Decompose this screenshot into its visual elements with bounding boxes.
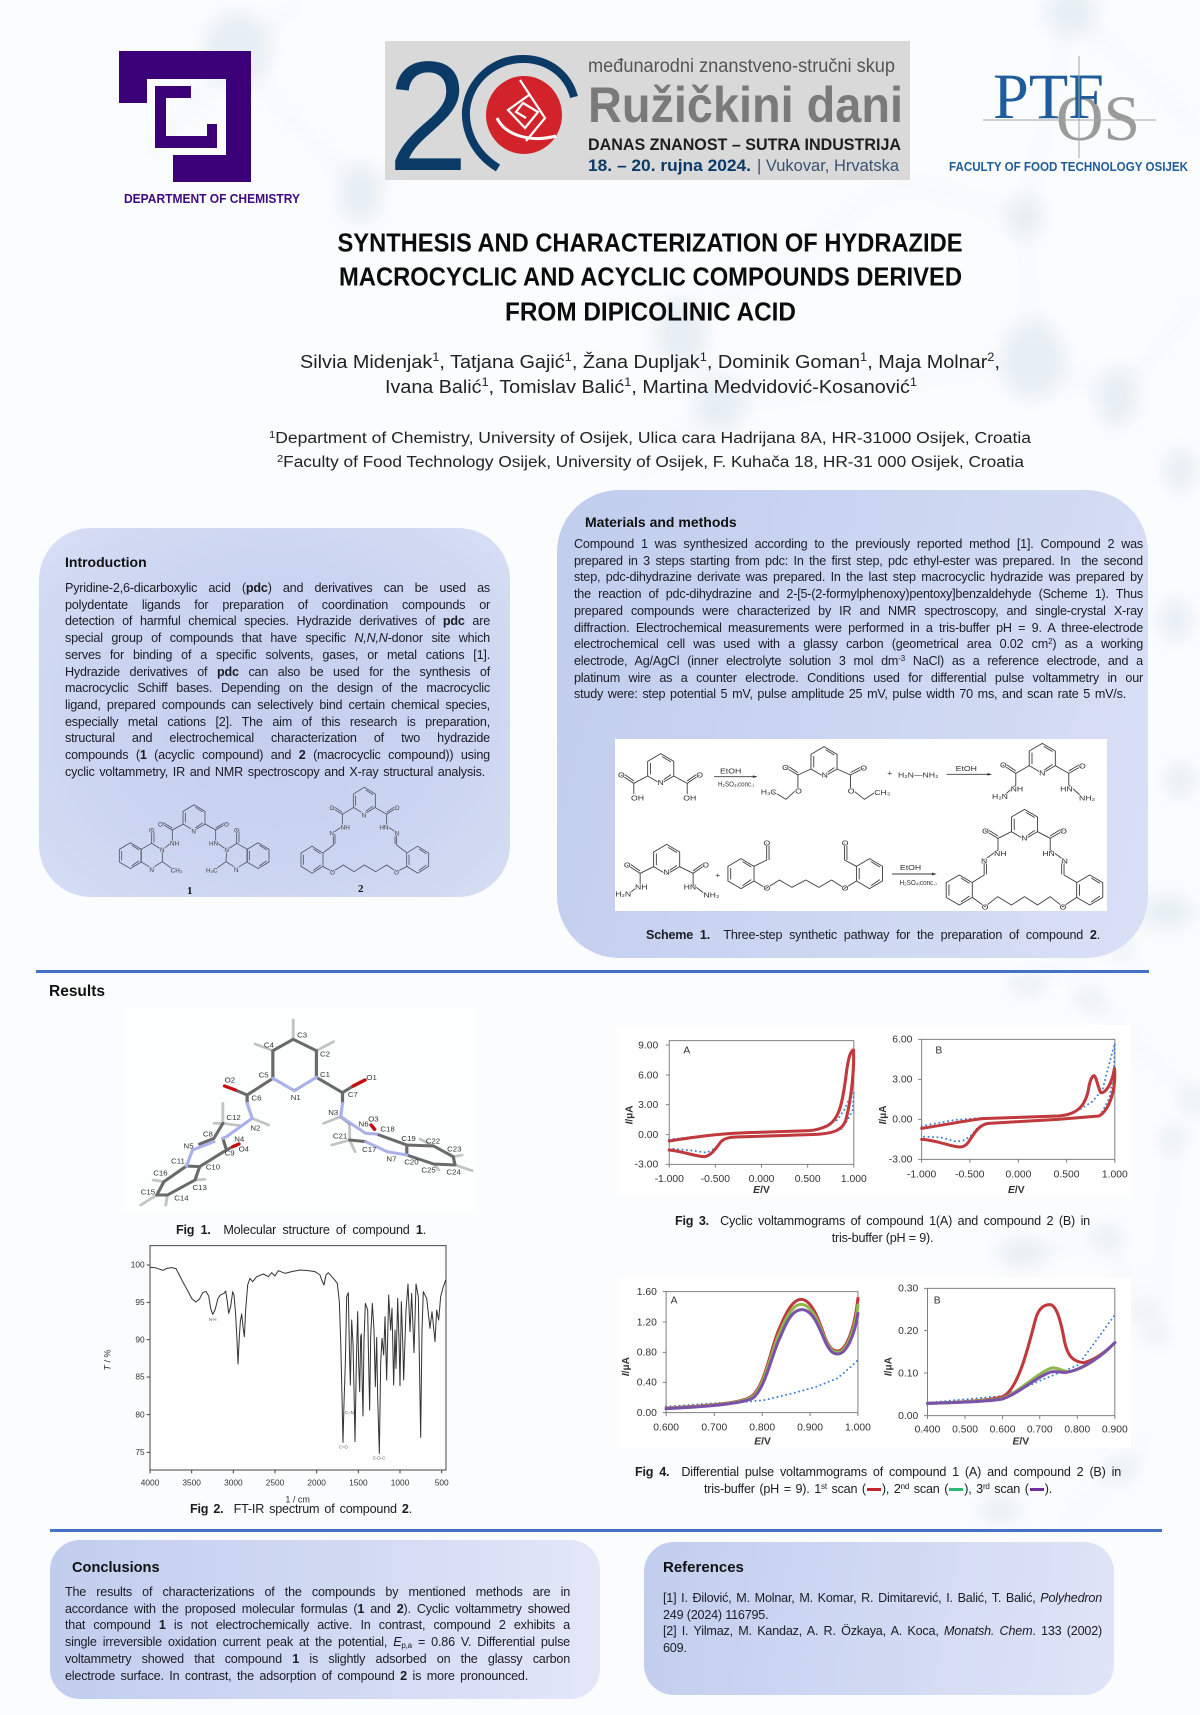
text: methods body: diffraction. Electrochemical measurements were performed in a tris-buffer pH = 9. A three-electrode — [574, 621, 1143, 635]
chart: synthetic scheme 1: N — [663, 868, 670, 876]
chart: molecular structure of compound 1: O2 — [225, 1076, 235, 1084]
chart: DPV compound 2 (B): 0.800 — [1064, 1425, 1091, 1436]
chart: synthetic scheme 1: N — [1062, 857, 1068, 865]
panel: introduction: O — [330, 870, 335, 877]
chart: FT-IR spectrum: 1500 — [349, 1478, 368, 1488]
chart: synthetic scheme 1: O — [1060, 827, 1067, 835]
structure: compound 2: N — [395, 830, 400, 837]
chart: DPV compound 2 (B): B — [934, 1295, 941, 1306]
title: FROM DIPICOLINIC ACID — [505, 296, 796, 326]
chart: synthetic scheme 1: NH — [994, 850, 1007, 858]
chart: DPV compound 1 (A): 0.40 — [637, 1378, 657, 1389]
text: introduction body: structural and electrochemical characterization of two hydrazide — [65, 731, 490, 745]
chart: synthetic scheme 1: N — [1021, 834, 1028, 842]
chart: differential pulse voltammograms — [617, 1278, 1131, 1448]
chart: DPV compound 1 (A): A — [671, 1295, 678, 1306]
chart: synthetic scheme 1: OH — [631, 794, 644, 802]
chart: CV compound 1 (A): -1.000 — [655, 1174, 684, 1185]
chart: CV compound 2 (B): 3.00 — [892, 1075, 913, 1086]
PTF OS wordmark: PTF — [993, 61, 1104, 133]
text: methods body: step, pdc-dihydrazine derivate was prepared. In the last step macrocyclic hydrazide was prepared by — [574, 570, 1143, 584]
chart: molecular structure of compound 1: C1 — [320, 1070, 330, 1079]
chart: DPV compound 1 (A): I/μA — [621, 1357, 632, 1376]
text: methods body — [574, 537, 1144, 701]
chart: CV compound 1 (A): 9.00 — [638, 1040, 659, 1051]
structure: compound 1: CH₃ — [171, 868, 183, 875]
text: references list: [1] I. Đilović, M. Molnar, M. Komar, R. Dimitarević, I. Balić, T. Balić, Polyhedron — [663, 1591, 1102, 1605]
text: methods body: the reaction of pdc-dihydrazine and 2-[5-(2-formylphenoxy)pentoxy]benzaldehyde (Scheme 1). Thus — [574, 587, 1143, 601]
chart: DPV compound 1 (A): 1.20 — [637, 1317, 657, 1328]
text: introduction body: Pyridine-2,6-dicarboxylic acid (pdc) and derivatives can be used as — [65, 581, 490, 595]
chart: molecular structure of compound 1: C9 — [225, 1149, 235, 1157]
chart: CV compound 2 (B): 0.000 — [1005, 1170, 1032, 1181]
conference text: međunarodni znanstveno-stručni skup — [588, 56, 895, 77]
chart: DPV compound 2 (B): I/μA — [884, 1357, 895, 1376]
chart: synthetic scheme 1: HN — [684, 883, 696, 891]
caption: fig 4: tris-buffer (pH = 9). 1st scan ( ), 2nd scan ( ), 3rd scan ( ). — [704, 1482, 1052, 1496]
chart: synthetic scheme 1: H₂SO₄₍conc.₎ — [718, 780, 754, 788]
conference text: DANAS ZNANOST – SUTRA INDUSTRIJA — [588, 135, 901, 154]
conference text: Ružičkini dani — [588, 77, 903, 133]
chart: DPV compound 1 (A): 0.80 — [637, 1348, 657, 1359]
chart: CV compound 2 (B): -3.00 — [889, 1155, 913, 1166]
chart: synthetic scheme 1: N — [1039, 769, 1046, 777]
chart: molecular structure of compound 1: C19 — [401, 1134, 416, 1143]
affiliations: Faculty of Food Technology Osijek, University of Osijek, F. Kuhača 18, HR-31 000 Osijek, Croatia — [283, 454, 1024, 471]
affiliations — [269, 430, 1031, 471]
chart: synthetic scheme 1: CH₃ — [874, 789, 890, 797]
panel: introduction — [39, 528, 510, 897]
structure: compound 1: N — [224, 847, 229, 854]
divider: above results — [36, 970, 1149, 973]
chart: FT-IR spectrum — [103, 1245, 449, 1504]
affiliations: Department of Chemistry, University of Osijek, Ulica cara Hadrijana 8A, HR-31000 Osijek, Croatia — [275, 430, 1031, 447]
chart: CV compound 1 (A): E/V — [753, 1185, 770, 1196]
chart: molecular structure of compound 1: C22 — [426, 1137, 440, 1146]
text: introduction body: detection of harmful chemical species. Hydrazide derivatives of pdc are — [65, 614, 490, 628]
chart: FT-IR spectrum: 95 — [135, 1297, 145, 1307]
chart: FT-IR spectrum: 85 — [135, 1372, 145, 1382]
text: introduction body: polydentate ligands for preparation of coordination compounds or — [65, 598, 490, 612]
chart: molecular structure of compound 1: N7 — [386, 1155, 396, 1164]
divider: above conclusions — [50, 1529, 1162, 1532]
text: references list: 609. — [663, 1641, 687, 1655]
chart: molecular structure of compound 1: C10 — [206, 1163, 220, 1171]
chart: synthetic scheme 1: O — [1060, 903, 1066, 911]
chart: synthetic scheme 1: O — [848, 787, 854, 795]
chart: CV compound 2 (B): 6.00 — [892, 1035, 913, 1046]
text: conclusions body: The results of characterizations of the compounds by mentioned methods are in — [65, 1585, 570, 1599]
chart: synthetic scheme 1: O — [1079, 762, 1086, 770]
text: introduction body: macrocyclic Schiff bases. Depending on the design of the macrocyclic — [65, 681, 490, 695]
authors: 1 — [910, 375, 917, 389]
chart: synthetic scheme 1: + — [715, 871, 721, 879]
chart: synthetic scheme 1: O — [982, 827, 989, 835]
structure: compound 2: HN — [379, 824, 389, 831]
chart: molecular structure of compound 1: C23 — [447, 1145, 462, 1154]
heading: results: Results — [49, 983, 105, 1000]
text: references list: 249 (2024) 116795. — [663, 1608, 768, 1622]
chart: molecular structure of compound 1: N6 — [359, 1120, 369, 1129]
chart: molecular structure of compound 1: C7 — [348, 1090, 358, 1099]
chart: DPV compound 2 (B): 0.900 — [1102, 1425, 1128, 1436]
chart: cyclic voltammograms — [617, 1025, 1131, 1197]
chart: CV compound 1 (A): 1.000 — [841, 1174, 867, 1185]
panel: references — [644, 1542, 1114, 1695]
chart: synthetic scheme 1: O — [764, 884, 770, 892]
structure: compound 1: HN — [209, 841, 219, 848]
chart: synthetic scheme 1: O — [842, 839, 849, 847]
text: introduction body: serves for binding of a specific solvents, gases, or metal cations [1]. — [65, 648, 490, 662]
conference text: 18. – 20. rujna 2024. — [588, 156, 751, 175]
chart: CV compound 2 (B): 0.00 — [892, 1115, 913, 1126]
text: introduction body: compounds (1 (acyclic compound) and 2 (macrocyclic compound)) using — [65, 748, 490, 762]
caption: fig 4: Fig 4. Differential pulse voltammograms of compound 1 (A) and compound 2 (B) in — [635, 1465, 1121, 1479]
heading: conclusions: Conclusions — [72, 1560, 160, 1576]
conference text: | Vukovar, Hrvatska — [757, 156, 900, 175]
chart: molecular structure of compound 1: C6 — [251, 1094, 261, 1103]
chart: CV compound 1 (A) — [624, 1040, 867, 1196]
chart: synthetic scheme 1: N — [822, 771, 828, 779]
chart: molecular structure of compound 1: C14 — [174, 1194, 189, 1203]
chart: DPV compound 2 (B): 0.400 — [915, 1425, 941, 1436]
chart: CV compound 1 (A): 0.00 — [638, 1130, 659, 1141]
chart: synthetic scheme 1: EtOH — [900, 864, 921, 872]
chart: molecular structure of compound 1: C15 — [141, 1188, 155, 1196]
authors: 2 — [987, 350, 995, 364]
chart: synthetic scheme 1: OH — [683, 794, 696, 802]
icon: purple square bracket mark — [119, 51, 251, 182]
text: methods body: electrochemical cell was used with a glassy carbon (geometrical area 0.02 cm2) as a working — [574, 637, 1143, 651]
chart: FT-IR spectrum: 100 — [131, 1260, 145, 1270]
text: conclusions body: accordance with the proposed molecular formulas (1 and 2). Cyclic voltammetry showed — [65, 1602, 570, 1616]
chart: synthetic scheme 1: NH — [1011, 785, 1023, 793]
chart: DPV compound 1 (A): 0.700 — [701, 1422, 728, 1433]
structure: compound 1: NH — [170, 841, 180, 848]
text: conclusions body: electrode surface. In contrast, the adsorption of compound 2 is more pronounced. — [65, 1669, 528, 1683]
chart: CV compound 2 (B): B — [935, 1045, 943, 1056]
chart: CV compound 2 (B): -0.500 — [955, 1170, 985, 1181]
text: methods body: platinum wire as a counter electrode. Conditions used for differential pulse voltammetry in our — [574, 671, 1143, 685]
structure: compound 1: H₃C — [206, 868, 218, 875]
icon: red rose — [486, 76, 562, 154]
text: conclusions body — [65, 1585, 570, 1683]
chart: molecular structure of compound 1: N3 — [328, 1108, 338, 1117]
chart: molecular structure of compound 1: C20 — [404, 1158, 419, 1166]
chart: synthetic scheme 1: O — [624, 861, 631, 869]
panel: introduction: O — [394, 870, 399, 877]
chart: molecular structure of compound 1: C2 — [320, 1050, 330, 1059]
chart: synthetic scheme 1: H₂N — [992, 793, 1008, 801]
chart: molecular structure of compound 1: C5 — [259, 1071, 269, 1079]
chart: CV compound 1 (A): 0.000 — [749, 1174, 775, 1185]
chart: CV compound 1 (A): 3.00 — [638, 1100, 659, 1111]
chart: FT-IR spectrum: N-H — [209, 1317, 217, 1322]
chart: DPV compound 1 (A): E/V — [754, 1437, 771, 1448]
chart: molecular structure of compound 1 — [123, 1008, 478, 1213]
text: introduction body: cyclic voltammetry, IR and NMR spectroscopy and X-ray structural analysis. — [65, 765, 485, 779]
chart: FT-IR spectrum: T / % — [103, 1349, 113, 1371]
chart: DPV compound 1 (A): 0.600 — [653, 1422, 679, 1433]
chart: FT-IR spectrum: C=N — [345, 1410, 354, 1415]
text: introduction body: ligand, prepared compounds can selectively bind certain chemical species, — [65, 698, 490, 712]
structure: compound 2: NH — [341, 824, 350, 831]
text: methods body: electrode, Ag/AgCl (inner electrolyte solution 3 mol dm-3 NaCl) as a reference electrode, and a — [574, 654, 1143, 668]
chart: CV compound 2 (B): 0.500 — [1054, 1170, 1080, 1181]
chart: CV compound 1 (A): -0.500 — [701, 1174, 730, 1185]
chart: synthetic scheme 1: H₂N—NH₂ — [898, 771, 938, 779]
chart: synthetic scheme 1: HN — [1042, 850, 1055, 858]
chart: DPV compound 1 (A): 1.000 — [845, 1422, 871, 1433]
authors — [300, 350, 1000, 397]
chart: synthetic scheme 1: O — [860, 764, 867, 772]
chart: molecular structure of compound 1: C13 — [193, 1183, 207, 1192]
chart: DPV compound 2 (B): E/V — [1012, 1437, 1029, 1448]
structure: compound 1: N — [160, 847, 165, 854]
text: conclusions body: single irreversible oxidation current peak at the potential, Ep,a = 0.86 V. Differential pulse — [65, 1635, 570, 1650]
authors: 1 — [565, 350, 572, 364]
authors: , Žana Dupljak — [572, 351, 700, 372]
affiliations: 2 — [277, 454, 284, 465]
chart: molecular structure of compound 1: O1 — [366, 1073, 377, 1082]
text: references list: [2] I. Yilmaz, M. Kandaz, A. R. Özkaya, A. Koca, Monatsh. Chem. 133 (2002) — [663, 1624, 1102, 1638]
text: conclusions body: voltammetry showed that compound 1 is slightly adsorbed on the glassy carbon — [65, 1652, 570, 1666]
chart: FT-IR spectrum: 2000 — [307, 1478, 326, 1488]
chart: molecular structure of compound 1: C12 — [226, 1113, 241, 1122]
chart: DPV compound 2 (B): 0.30 — [898, 1284, 919, 1295]
authors: , Dominik Goman — [707, 351, 860, 372]
caption: scheme 1: Scheme 1. Three-step synthetic pathway for the preparation of compound 2. — [646, 928, 1100, 942]
text: methods body: prepared compounds were characterized by IR and NMR spectroscopy, and single-crystal X-ray — [574, 604, 1143, 618]
chart: FT-IR spectrum: C-O-C — [373, 1455, 385, 1460]
chart: FT-IR spectrum: 1 / cm — [285, 1494, 310, 1504]
panel: conclusions — [50, 1540, 600, 1699]
chart: molecular structure of compound 1: C11 — [171, 1157, 185, 1166]
chart: molecular structure of compound 1: N1 — [291, 1093, 301, 1102]
chart: CV compound 1 (A): I/μA — [624, 1105, 635, 1124]
chart: molecular structure of compound 1: C24 — [446, 1168, 461, 1177]
chart: molecular structure of compound 1: N4 — [234, 1135, 244, 1143]
chart: molecular structure of compound 1: C16 — [153, 1169, 168, 1177]
chart: DPV compound 2 (B): 0.00 — [898, 1411, 919, 1422]
chart: FT-IR spectrum: 75 — [135, 1447, 145, 1457]
authors: 1 — [700, 350, 707, 364]
chart: synthetic scheme 1: H₃C — [761, 788, 777, 796]
panel: materials and methods — [557, 490, 1148, 958]
chart: synthetic scheme 1: O — [618, 771, 625, 779]
chart: synthetic scheme 1: NH₂ — [703, 891, 719, 899]
chart: DPV compound 2 (B): 0.20 — [898, 1326, 919, 1337]
label: compound 2: 2 — [358, 883, 364, 895]
chart: DPV compound 2 (B): 0.700 — [1027, 1425, 1053, 1436]
caption: fig 3: Fig 3. Cyclic voltammograms of compound 1(A) and compound 2 (B) in — [675, 1214, 1090, 1228]
chart: molecular structure of compound 1: C21 — [333, 1132, 347, 1140]
logo: PTFOS faculty of food technology — [949, 56, 1188, 174]
chart: synthetic scheme 1: EtOH — [956, 765, 977, 773]
text: introduction body — [65, 581, 490, 779]
chart: synthetic scheme 1: O — [1000, 761, 1007, 769]
authors: Ivana Balić — [385, 376, 476, 397]
title: MACROCYCLIC AND ACYCLIC COMPOUNDS DERIVED — [339, 262, 962, 292]
chart: molecular structure of compound 1: C25 — [421, 1166, 436, 1174]
text: references list — [663, 1591, 1102, 1655]
chart: CV compound 1 (A): A — [683, 1045, 690, 1056]
chart: DPV compound 1 (A): 0.800 — [749, 1422, 775, 1433]
chart: DPV compound 1 (A) — [621, 1287, 871, 1448]
text: methods body: study were: step potential 5 mV, pulse amplitude 25 mV, pulse width 70 ms, and scan rate 5 mV/s. — [574, 687, 1126, 701]
caption: fig 3: tris-buffer (pH = 9). — [832, 1231, 933, 1245]
chart: CV compound 1 (A): 0.500 — [795, 1174, 821, 1185]
affiliations: 1 — [269, 430, 276, 441]
chart: molecular structure of compound 1: O3 — [368, 1115, 379, 1124]
chart: molecular structure of compound 1: C18 — [380, 1125, 395, 1134]
chart: synthetic scheme 1: O — [696, 771, 703, 779]
chart: DPV compound 2 (B) — [884, 1284, 1128, 1448]
authors: 1 — [860, 350, 868, 364]
chart: synthetic scheme 1: O — [842, 884, 849, 892]
chart: FT-IR spectrum: 80 — [135, 1409, 145, 1419]
authors: Silvia Midenjak — [300, 351, 423, 372]
chart: synthetic scheme 1: + — [887, 769, 893, 777]
chart: synthetic scheme 1: O — [702, 861, 709, 869]
structure: compound 1 — [118, 804, 270, 875]
chart: FT-IR spectrum: C=O — [339, 1445, 348, 1450]
chart: DPV compound 2 (B): 0.500 — [952, 1425, 978, 1436]
chart: CV compound 1 (A): -3.00 — [635, 1160, 659, 1171]
chart: DPV compound 1 (A): 1.60 — [637, 1287, 657, 1298]
chart: FT-IR spectrum: 1000 — [391, 1478, 410, 1488]
chart: synthetic scheme 1: O — [982, 903, 989, 911]
caption: fig 4 — [635, 1465, 1121, 1496]
text: conclusions body: that compound 1 is not electrochemically active. In contrast, compound 2 exhibits a — [65, 1618, 570, 1632]
structure: compound 1: O — [234, 828, 239, 835]
chart: FT-IR spectrum: 500 — [435, 1478, 449, 1488]
structure: compound 1: O — [224, 822, 229, 829]
conference text — [588, 56, 903, 175]
heading: introduction: Introduction — [65, 554, 147, 570]
PTF OS wordmark — [983, 56, 1156, 158]
chart: CV compound 2 (B): E/V — [1008, 1185, 1025, 1196]
anniversary number 20: 2 — [388, 30, 468, 204]
chart: FT-IR spectrum: 90 — [135, 1334, 145, 1344]
chart: molecular structure of compound 1: O4 — [239, 1145, 249, 1153]
authors: , Maja Molnar — [867, 351, 987, 372]
chart: CV compound 2 (B): 1.000 — [1102, 1170, 1128, 1181]
title: SYNTHESIS AND CHARACTERIZATION OF HYDRAZIDE — [338, 228, 962, 258]
chart: FT-IR spectrum: 3500 — [182, 1478, 201, 1488]
heading: references: References — [663, 1559, 744, 1576]
caption: fig 2: Fig 2. FT-IR spectrum of compound 2. — [190, 1502, 412, 1516]
caption: fig 3 — [675, 1214, 1090, 1245]
chart: synthetic scheme 1: O — [795, 787, 802, 795]
chart: DPV compound 2 (B): 0.10 — [898, 1368, 919, 1379]
chart: synthetic scheme 1: N — [658, 779, 664, 787]
title — [338, 228, 962, 326]
structure: compound 1: N — [191, 828, 196, 835]
chart: synthetic scheme 1: O — [764, 839, 770, 847]
caption: fig 1: Fig 1. Molecular structure of compound 1. — [176, 1223, 426, 1237]
chart: synthetic scheme 1: NH₂ — [1079, 794, 1095, 802]
chart: CV compound 2 (B): -1.000 — [907, 1170, 937, 1181]
structure: compound 2 — [300, 786, 430, 877]
chart: synthetic scheme 1: H₂N — [615, 890, 631, 898]
authors: 1 — [624, 375, 632, 389]
structure: compound 1: O — [158, 822, 163, 829]
logo: department of chemistry — [119, 51, 301, 206]
text: introduction body: especially metal cations [2]. The aim of this research is preparation, — [65, 715, 490, 729]
chart: molecular structure of compound 1: C8 — [203, 1130, 213, 1139]
chart: molecular structure of compound 1: N5 — [184, 1142, 194, 1150]
structure: compound 1: N — [149, 867, 154, 874]
chart: molecular structure of compound 1: C17 — [362, 1145, 377, 1154]
structure: compound 2: N — [362, 812, 367, 819]
authors: , Tomislav Balić — [489, 376, 624, 397]
structure: compound 1: N — [234, 867, 239, 874]
chart: synthetic scheme 1: N — [981, 857, 987, 865]
chart: CV compound 1 (A): 6.00 — [638, 1070, 659, 1081]
chart: DPV compound 1 (A): 0.00 — [637, 1408, 657, 1419]
text: introduction body: Hydrazide derivatives of pdc can also be used for the synthesis of — [65, 665, 490, 679]
chart: DPV compound 1 (A): 0.900 — [797, 1422, 823, 1433]
chart: synthetic scheme 1 — [615, 739, 1107, 911]
chart: FT-IR spectrum: 2500 — [266, 1478, 285, 1488]
chart: synthetic scheme 1: NH — [635, 883, 648, 891]
chart: DPV compound 2 (B): 0.600 — [990, 1425, 1016, 1436]
chart: molecular structure of compound 1: C4 — [264, 1041, 274, 1050]
anniversary number 20 — [388, 30, 574, 204]
authors: , Martina Medvidović-Kosanović — [631, 376, 910, 397]
conference banner: Ružičkini dani — [385, 30, 910, 204]
chart: FT-IR spectrum: 3000 — [224, 1478, 243, 1488]
structure: compound 2: O — [329, 805, 334, 812]
chart: synthetic scheme 1: EtOH — [720, 767, 741, 775]
structure: compound 1: O — [149, 828, 154, 835]
structure: compound 2: N — [329, 830, 334, 837]
structure: compound 2: O — [395, 805, 400, 812]
chart: FT-IR spectrum: 4000 — [141, 1478, 160, 1488]
authors: , Tatjana Gajić — [439, 351, 565, 372]
authors: 1 — [432, 350, 440, 364]
text: methods body: prepared in 3 steps starting from pdc: In the first step, pdc ethyl-ester was prepared. In the second — [574, 554, 1143, 568]
chart: synthetic scheme 1: O — [782, 764, 789, 772]
faculty label: FACULTY OF FOOD TECHNOLOGY OSIJEK — [949, 160, 1188, 174]
heading: materials and methods: Materials and methods — [585, 514, 737, 530]
chart: CV compound 2 (B) — [878, 1035, 1128, 1196]
text: methods body: Compound 1 was synthesized according to the previously reported method [1]. Compound 2 was — [574, 537, 1143, 551]
authors: 1 — [482, 375, 489, 389]
department label: DEPARTMENT OF CHEMISTRY — [124, 192, 301, 206]
chart: synthetic scheme 1: H₂SO₄₍conc.₎ — [900, 879, 937, 887]
authors: , — [994, 351, 1000, 372]
chart: synthetic scheme 1: HN — [1060, 785, 1073, 793]
text: introduction body: special group of compounds that have specific N,N,N-donor site which — [65, 631, 490, 645]
chart: CV compound 2 (B): I/μA — [878, 1105, 889, 1124]
chart: molecular structure of compound 1: N2 — [250, 1124, 260, 1132]
chart: molecular structure of compound 1: C3 — [297, 1031, 307, 1039]
label: compound 1: 1 — [187, 885, 192, 897]
PTF OS wordmark: OS — [1056, 83, 1140, 155]
